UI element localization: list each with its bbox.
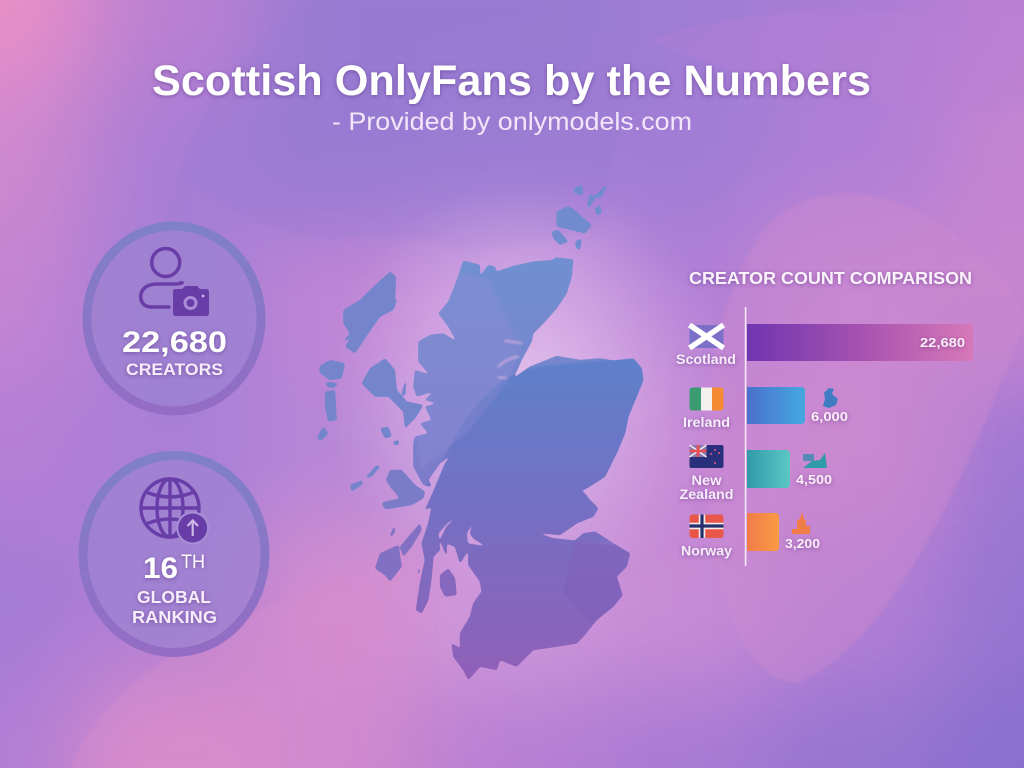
ranking value: 16	[143, 552, 178, 585]
country labels: Zealand	[680, 487, 734, 502]
bar: Scotland	[747, 324, 973, 361]
islands	[317, 183, 608, 597]
map of Scotland	[317, 183, 647, 683]
flag: Ireland	[690, 388, 724, 410]
bar: Norway: 3,200	[785, 536, 820, 551]
bar chart: creator count comparison	[676, 307, 973, 566]
ranking value: TH	[181, 552, 205, 573]
stat circle: creators	[87, 226, 261, 411]
mainland	[413, 253, 647, 683]
bar: Ireland	[747, 387, 848, 424]
icon: person with camera	[141, 248, 209, 316]
country labels: Norway	[681, 544, 732, 558]
bar: Scotland: 22,680	[920, 335, 965, 350]
icon: globe with up arrow	[141, 479, 209, 544]
flag: New Zealand	[690, 445, 724, 468]
bar: Ireland: 6,000	[811, 409, 848, 424]
creators value: 22,680	[122, 326, 227, 359]
country labels: Scotland	[676, 352, 736, 367]
country labels	[676, 352, 736, 558]
firths	[498, 341, 522, 378]
bar: New Zealand	[747, 450, 832, 488]
country labels: Ireland	[683, 415, 730, 430]
chart heading: CREATOR COUNT COMPARISON	[689, 268, 972, 288]
country labels: New	[692, 473, 722, 488]
subtitle: - Provided by onlymodels.com	[332, 108, 692, 136]
flag: Norway	[690, 514, 724, 538]
title: Scottish OnlyFans by the Numbers	[152, 57, 871, 105]
flag: Scotland	[690, 325, 724, 348]
bar: Norway	[747, 512, 820, 551]
bar: New Zealand: 4,500	[796, 472, 832, 487]
ranking label: GLOBAL	[137, 587, 211, 607]
ranking value	[143, 552, 205, 585]
ranking label	[132, 587, 217, 627]
ranking label: RANKING	[132, 607, 217, 627]
creators label: CREATORS	[126, 360, 223, 379]
stat circle: global ranking	[83, 456, 265, 652]
axis line	[745, 307, 746, 566]
